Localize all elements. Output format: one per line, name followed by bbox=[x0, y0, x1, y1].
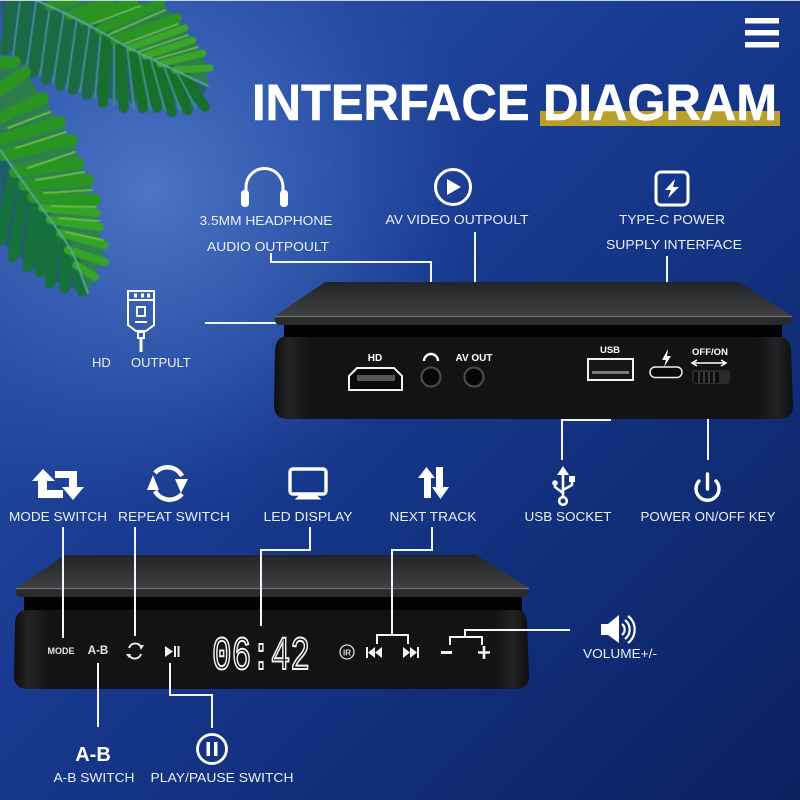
connector lines: front bbox=[63, 527, 570, 728]
icon: pause circle bbox=[198, 734, 226, 764]
label: volume: VOLUME+/- bbox=[583, 646, 657, 661]
port: type-C bbox=[650, 367, 682, 378]
port: HDMI bbox=[349, 368, 402, 390]
label: AV OUT: AV OUT bbox=[455, 353, 493, 364]
port: USB bbox=[588, 359, 633, 380]
palm frond: lower bbox=[0, 60, 105, 293]
icon: minus bbox=[441, 651, 452, 654]
icon: up down arrows bbox=[418, 467, 449, 499]
label: LED display: LED DISPLAY bbox=[264, 509, 353, 524]
icon: mode switch bbox=[32, 469, 84, 500]
label: MODE: MODE bbox=[48, 646, 74, 656]
switch bbox=[692, 370, 730, 384]
icon: play circle bbox=[436, 170, 470, 204]
label: type-C: SUPPLY INTERFACE bbox=[606, 237, 742, 252]
icon: lightning mini bbox=[662, 349, 671, 367]
icon: repeat bbox=[147, 467, 188, 500]
label: A-B switch: A-B SWITCH bbox=[54, 770, 134, 785]
icon: power bbox=[696, 474, 719, 500]
label: play pause switch: PLAY/PAUSE SWITCH bbox=[150, 770, 294, 785]
top edge line bbox=[0, 0, 800, 1]
label: headphone: AUDIO OUTPOULT bbox=[207, 239, 329, 254]
product: front view device bbox=[14, 555, 529, 689]
icon: headphones bbox=[241, 168, 288, 207]
icon: play pause mini bbox=[165, 646, 180, 657]
label: headphone bbox=[200, 213, 333, 254]
label: type-C: TYPE-C POWER bbox=[619, 212, 725, 227]
label: HDMI output: OUTPULT bbox=[131, 355, 191, 370]
top plate bbox=[275, 282, 792, 325]
icon: A-B text: A-B bbox=[75, 744, 111, 766]
icon: plus bbox=[478, 646, 490, 659]
product: rear view device bbox=[274, 282, 793, 419]
palm frond: upper bbox=[0, 0, 210, 112]
label: power key: POWER ON/OFF KEY bbox=[640, 509, 776, 524]
icon: power lightning box bbox=[656, 172, 688, 205]
label: HD: HD bbox=[368, 353, 382, 364]
icon: USB bbox=[552, 466, 575, 505]
title underline accent bbox=[540, 111, 780, 126]
label: next track: NEXT TRACK bbox=[390, 509, 477, 524]
label: OFF/ON: OFF/ON bbox=[692, 347, 728, 358]
icon: IR: IR bbox=[343, 648, 351, 658]
gap shadow bbox=[24, 597, 522, 613]
icon: switch arrows bbox=[692, 360, 726, 366]
icon: previous bbox=[366, 647, 382, 658]
chassis bbox=[274, 337, 793, 419]
label: AV video: AV VIDEO OUTPOULT bbox=[386, 212, 529, 227]
icon: headphone mini bbox=[424, 354, 438, 361]
port: AV jack bbox=[464, 368, 484, 386]
label: HDMI output: HD bbox=[92, 355, 111, 370]
LED clock: 06:42 bbox=[212, 631, 310, 684]
icon: next bbox=[403, 647, 419, 658]
connector lines bbox=[205, 232, 708, 460]
label: mode switch: MODE SWITCH bbox=[9, 509, 107, 524]
icon: monitor bbox=[290, 469, 326, 499]
label: USB socket: USB SOCKET bbox=[524, 509, 612, 524]
top plate bbox=[16, 555, 529, 597]
gap shadow bbox=[284, 325, 782, 339]
icon: hamburger menu bbox=[745, 18, 779, 48]
label: USB: USB bbox=[600, 345, 620, 356]
port: headphone jack bbox=[422, 368, 440, 386]
label: repeat switch: REPEAT SWITCH bbox=[118, 509, 230, 524]
icon: HDMI plug bbox=[128, 291, 154, 352]
label: headphone: 3.5MM HEADPHONE bbox=[200, 213, 333, 228]
label: type-C bbox=[606, 212, 742, 252]
icon: speaker bbox=[601, 615, 635, 643]
title: INTERFACE DIAGRAM bbox=[252, 74, 777, 131]
label: A-B: A-B bbox=[88, 645, 108, 657]
icon: repeat mini bbox=[126, 643, 144, 659]
chassis bbox=[14, 610, 529, 689]
icon: IR bbox=[340, 645, 354, 659]
